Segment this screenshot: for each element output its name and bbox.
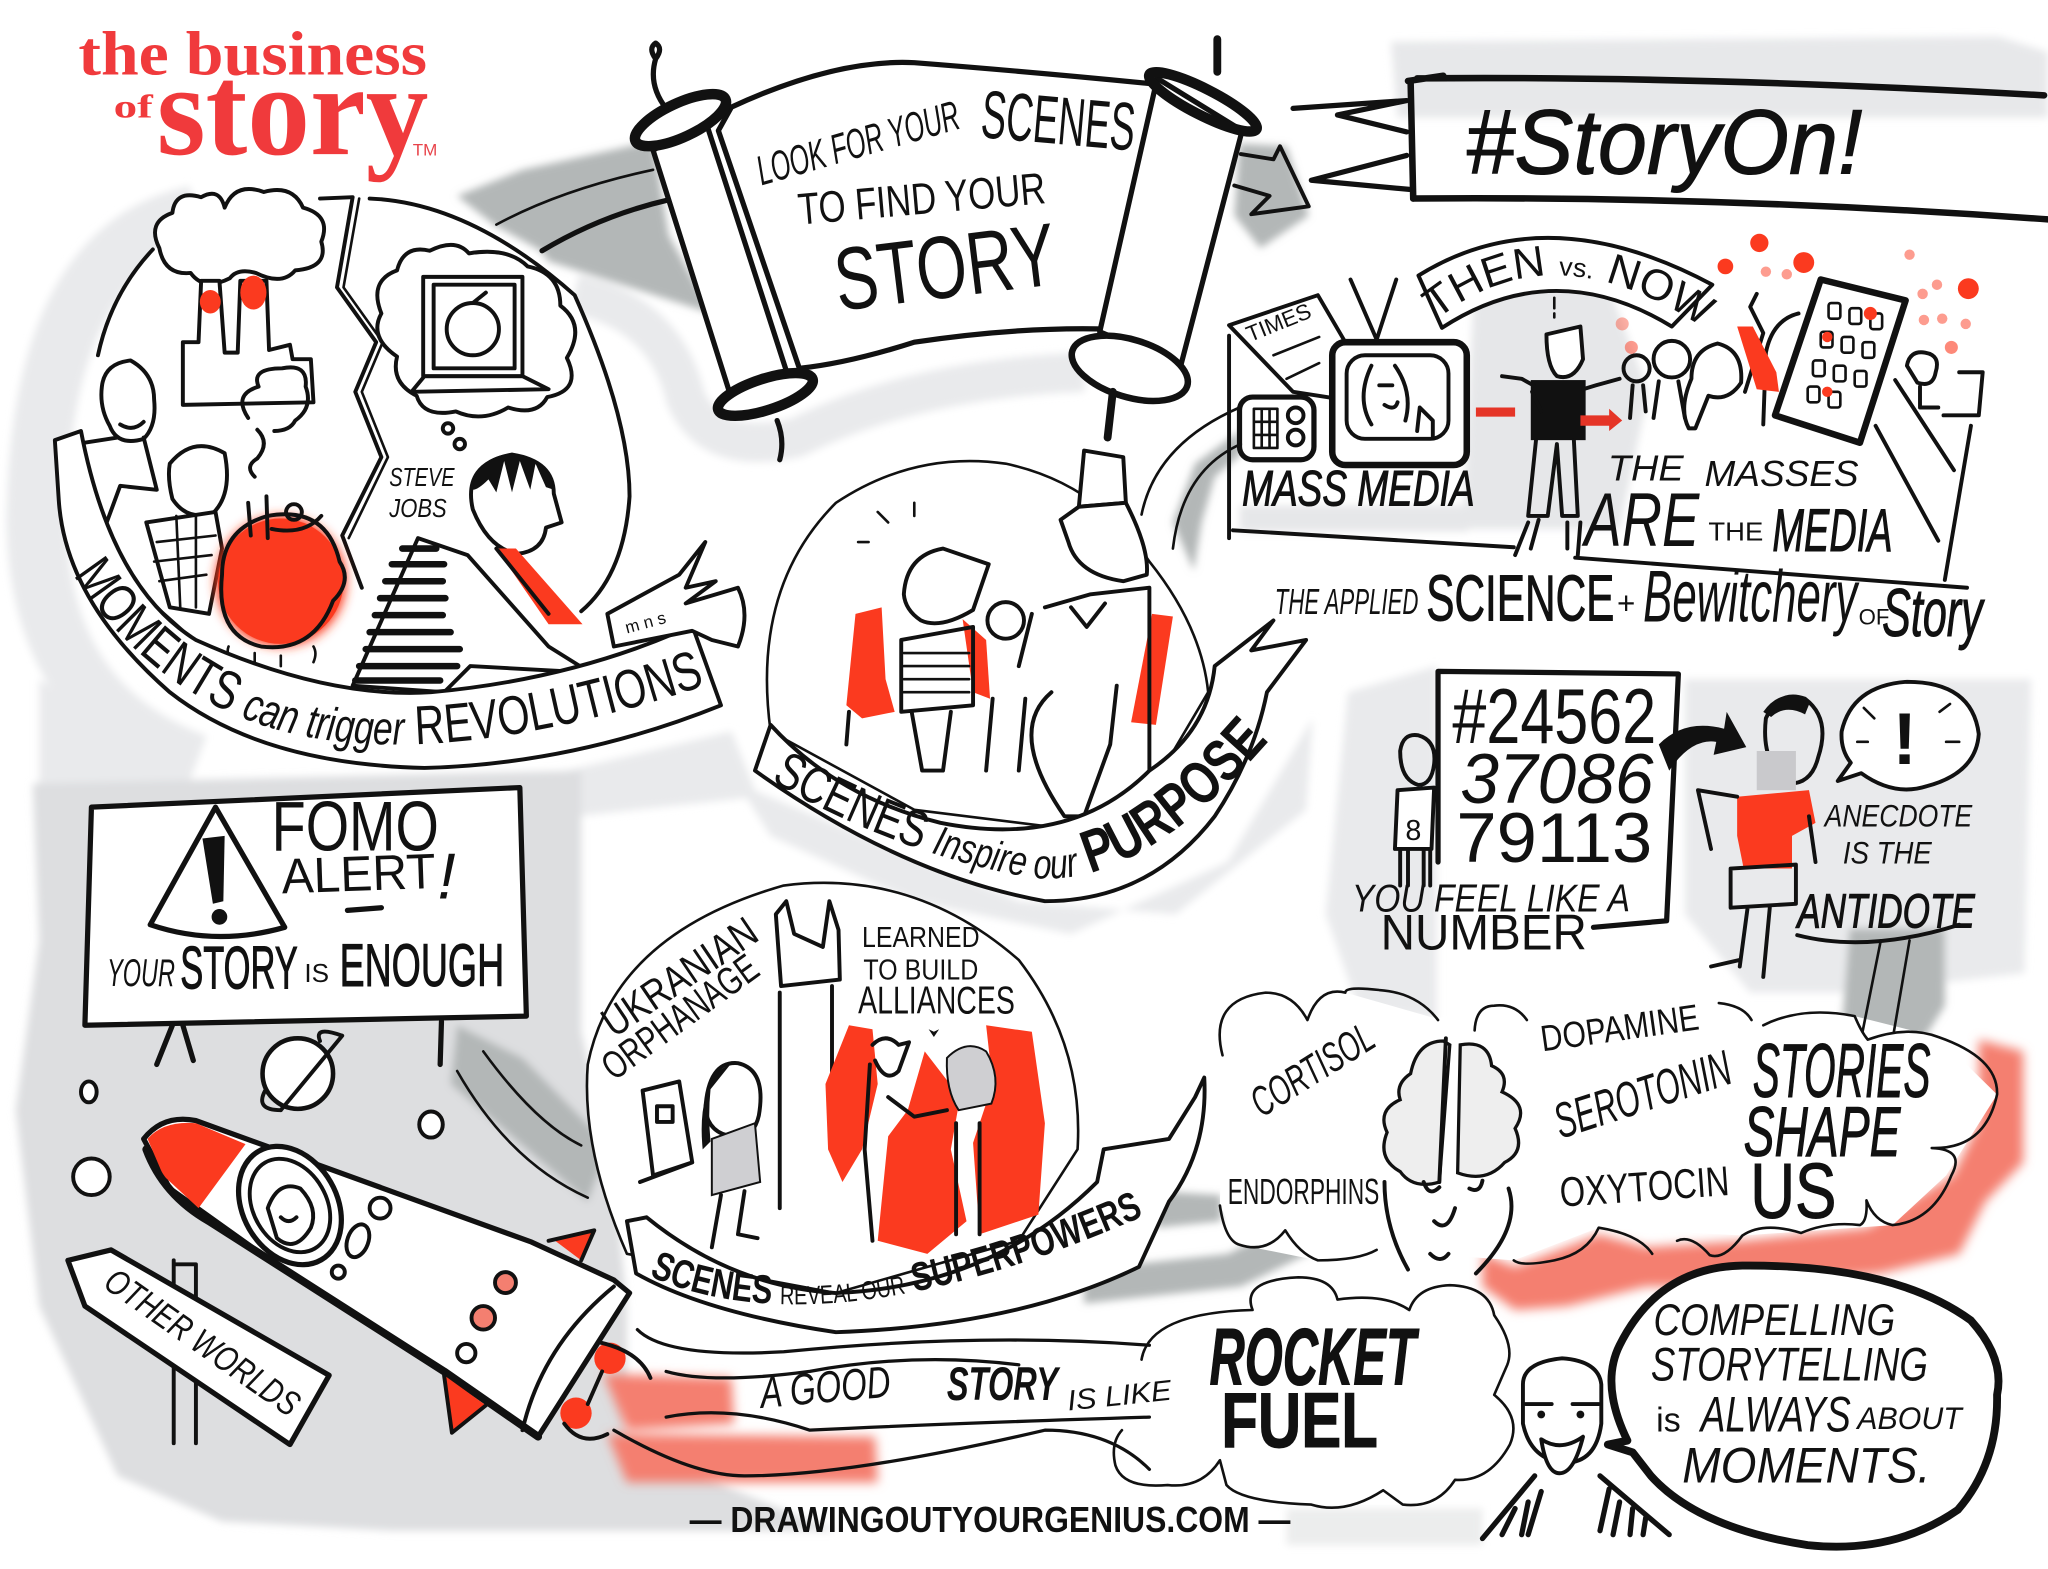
heading: applied science and bewitchery: Bewitchery <box>1643 557 1860 638</box>
text: your story is enough: ENOUGH <box>340 932 504 999</box>
logo: the business of story: the business <box>78 18 427 88</box>
logo: the business of story: TM <box>413 140 437 159</box>
arrow: antidote to stories shape us <box>1863 940 1910 1032</box>
text: mass media: MASS MEDIA <box>1242 460 1475 516</box>
text: you feel like a number: NUMBER <box>1381 905 1587 961</box>
text: your story is enough: IS <box>304 958 329 988</box>
text: Steve Jobs: STEVE <box>389 462 455 492</box>
number board: 37086 <box>1460 739 1654 818</box>
number board: #24562 <box>1452 672 1656 760</box>
red curtains and figures <box>825 1025 1045 1254</box>
footer url: — DRAWINGOUTYOURGENIUS.COM — <box>690 1499 1291 1540</box>
icon: two women with heart <box>865 1029 996 1241</box>
icon: small moons <box>73 1081 443 1195</box>
text: look for your scenes to find your story: TO FIND YOUR <box>796 164 1047 235</box>
text: learned to build alliances: TO BUILD <box>863 955 978 987</box>
icon: nurse figure <box>1019 451 1149 816</box>
rocket portholes <box>332 1198 516 1362</box>
left roller <box>628 43 817 460</box>
icon: radio <box>1240 397 1314 460</box>
icon: presenter portrait <box>1482 1358 1669 1539</box>
panel: numbers vs anecdote <box>1352 671 1979 977</box>
number board <box>1438 671 1678 927</box>
panel: stories shape us brain cloud <box>1220 940 1997 1273</box>
text: hormones <box>1228 997 1738 1216</box>
icon: newspaper: TIMES <box>1242 298 1315 347</box>
banner: scenes inspire our purpose <box>752 618 1308 904</box>
red splatter <box>1616 234 1979 397</box>
text: you feel like a number <box>1352 878 1630 961</box>
text: the masses are the media: THE <box>1608 448 1684 489</box>
text: learned to build alliances <box>858 922 1015 1023</box>
rocket fins <box>444 1230 594 1433</box>
text: the masses are the media: MASSES <box>1704 453 1859 494</box>
arrow: grey motion lines <box>457 1051 588 1198</box>
icon: Steve Jobs figure with quill <box>353 453 590 692</box>
panel: scroll banner <box>628 39 1262 460</box>
text: hormones: DOPAMINE <box>1538 997 1701 1059</box>
text: anecdote is the antidote: IS THE <box>1843 835 1933 870</box>
icon: ringed planet <box>262 1032 342 1110</box>
speech bubble: compelling storytelling: is <box>1656 1401 1681 1439</box>
scroll centre sheet <box>718 62 1164 368</box>
speech bubble: compelling storytelling: COMPELLING <box>1654 1296 1895 1345</box>
text: stories shape us <box>1744 1029 1930 1234</box>
icon: seated listener <box>846 503 1025 771</box>
heading: applied science and bewitchery: OF <box>1859 604 1889 629</box>
arrow: connector from media to scenes circle <box>1142 407 1241 549</box>
icon: crowd with phone <box>1624 280 1983 443</box>
text: ukranian orphanage: ORPHANAGE <box>594 946 767 1089</box>
icon: thought cloud with apple painting <box>377 245 575 449</box>
text: hormones: OXYTOCIN <box>1558 1157 1731 1216</box>
logo: the business of story <box>78 18 437 183</box>
rocket nozzle and engines <box>522 1286 650 1439</box>
text: the masses are the media: THE <box>1708 517 1763 547</box>
arrow: grey connector to scroll <box>496 170 669 251</box>
icon: girl in grey dress <box>702 1063 761 1247</box>
arrow: curved black arrow <box>1659 712 1746 771</box>
heading: applied science and bewitchery: THE APPLIED <box>1275 581 1418 622</box>
speech bubble: compelling storytelling: MOMENTS. <box>1682 1437 1930 1493</box>
text: fomo alert: ! <box>438 840 456 913</box>
text: the masses are the media: MEDIA <box>1772 497 1893 564</box>
icon: exclamation speech bubble: ! <box>1893 699 1917 780</box>
red washes: cloud shadow and rocket exhaust <box>603 1040 2023 1482</box>
icon: woman with hair bun <box>76 360 157 535</box>
text: look for your scenes to find your story: STORY <box>829 204 1061 330</box>
icon: exclamation speech bubble <box>1838 682 1979 789</box>
text: look for your scenes to find your story <box>751 77 1138 330</box>
icon: brain and head <box>1384 1038 1521 1273</box>
icon: castle tower <box>776 901 840 1208</box>
text: anecdote is the antidote: ANECDOTE <box>1823 799 1973 834</box>
icon: warning triangle <box>150 807 285 937</box>
speech bubble: compelling storytelling: ALWAYS <box>1698 1386 1851 1442</box>
text: stories shape us: SHAPE <box>1744 1092 1901 1171</box>
text: fomo alert: FOMO <box>272 786 439 865</box>
banner: #StoryOn <box>1293 76 2048 219</box>
icon: presenter figure <box>1502 298 1620 555</box>
icon: factory smoke cloud <box>155 189 324 284</box>
text: look for your scenes to find your story: LOOK FOR YOUR <box>751 91 965 194</box>
banner: moments can trigger revolutions <box>52 429 723 770</box>
text: fomo alert: ALERT <box>281 843 437 904</box>
red chairs <box>846 607 1173 725</box>
icon: woman with red top <box>1698 695 1822 977</box>
speech bubble: compelling storytelling: ABOUT <box>1855 1401 1964 1436</box>
heading: applied science and bewitchery <box>1275 557 1985 651</box>
icon: small scroll flag: m n s <box>623 608 668 637</box>
text: fomo alert <box>272 786 456 913</box>
icon: newspaper <box>1229 295 1345 398</box>
text: stories shape us: US <box>1750 1146 1836 1234</box>
banner: moments can trigger revolutions: MOMENTS can trigger REVOLUTIONS <box>75 556 701 753</box>
panel: scenes reveal our superpowers <box>586 882 1207 1334</box>
icon: other worlds signpost: OTHER WORLDS <box>97 1261 307 1424</box>
icon: doorway <box>640 1081 692 1182</box>
banner: a good story is like <box>614 1330 1174 1476</box>
banner: scenes reveal our superpowers <box>624 1076 1207 1334</box>
heading: applied science and bewitchery: + <box>1617 586 1635 621</box>
heading: applied science and bewitchery: SCIENCE <box>1426 561 1614 634</box>
text: Steve Jobs: JOBS <box>388 493 447 523</box>
text: you feel like a number: YOU FEEL LIKE A <box>1352 878 1630 921</box>
banner: a good story is like: A GOOD <box>756 1358 892 1418</box>
banner: scenes reveal our superpowers: SCENES REVEAL OUR SUPERPOWERS <box>652 1192 1141 1304</box>
icon: small arrow head by scroll <box>1234 146 1309 214</box>
text: hormones: ENDORPHINS <box>1228 1171 1379 1212</box>
banner: #StoryOn: #StoryOn! <box>1465 92 1863 194</box>
icon: television <box>1332 280 1467 465</box>
number board: 79113 <box>1456 798 1652 877</box>
text: anecdote is the antidote: ANTIDOTE <box>1795 884 1975 938</box>
text: the masses are the media: ARE <box>1581 478 1700 563</box>
speech bubble: compelling storytelling: STORYTELLING <box>1651 1338 1928 1391</box>
banner: a good story is like: IS LIKE <box>1066 1375 1174 1418</box>
icon: small numbered person: 8 <box>1405 815 1421 847</box>
text: Steve Jobs <box>388 462 455 523</box>
text: hormones: CORTISOL <box>1242 1013 1383 1126</box>
rocket window with astronaut <box>218 1128 362 1283</box>
panel: rocket fuel cloud: FUEL <box>1221 1376 1378 1464</box>
banner: a good story is like: STORY <box>947 1357 1060 1410</box>
icon: red boiling kettle <box>216 367 346 666</box>
logo: the business of story: of <box>114 90 154 126</box>
text: your story is enough: STORY <box>180 935 298 1002</box>
speech bubble: compelling storytelling <box>1608 1266 1999 1547</box>
panel: fomo alert sign <box>85 786 526 1064</box>
panel: moments can trigger revolutions <box>52 187 746 770</box>
icon: small numbered person <box>1395 735 1434 886</box>
panel: then vs now <box>1227 234 1985 590</box>
text: the masses are the media <box>1581 448 1893 564</box>
panel: rocket <box>144 1119 650 1439</box>
text: look for your scenes to find your story: SCENES <box>978 77 1138 166</box>
icon: small scroll flag <box>607 542 744 647</box>
text: your story is enough <box>107 932 504 1002</box>
text: learned to build alliances: LEARNED <box>862 922 980 954</box>
heading: applied science and bewitchery: Story <box>1882 576 1985 651</box>
icon: factory <box>183 276 313 405</box>
panel: rocket fuel cloud: ROCKET <box>1209 1312 1420 1402</box>
panel: rocket fuel cloud <box>1114 1277 1513 1508</box>
logo: the business of story: story <box>157 39 428 183</box>
right roller <box>1064 39 1262 438</box>
banner: scenes inspire our purpose: SCENES Inspire our PURPOSE <box>776 715 1268 879</box>
text: your story is enough: YOUR <box>107 952 175 995</box>
text: anecdote is the antidote <box>1795 799 1975 942</box>
text: learned to build alliances: ALLIANCES <box>858 980 1015 1023</box>
text: hormones: SEROTONIN <box>1547 1040 1738 1149</box>
panel: scenes inspire purpose <box>752 448 1308 904</box>
text: ukranian orphanage: UKRANIAN <box>593 908 766 1046</box>
icon: boy with plaid shirt <box>137 446 227 647</box>
red dotted arrows <box>1476 407 1622 431</box>
banner: then vs now arch: THEN vs. NOW <box>1420 246 1718 322</box>
